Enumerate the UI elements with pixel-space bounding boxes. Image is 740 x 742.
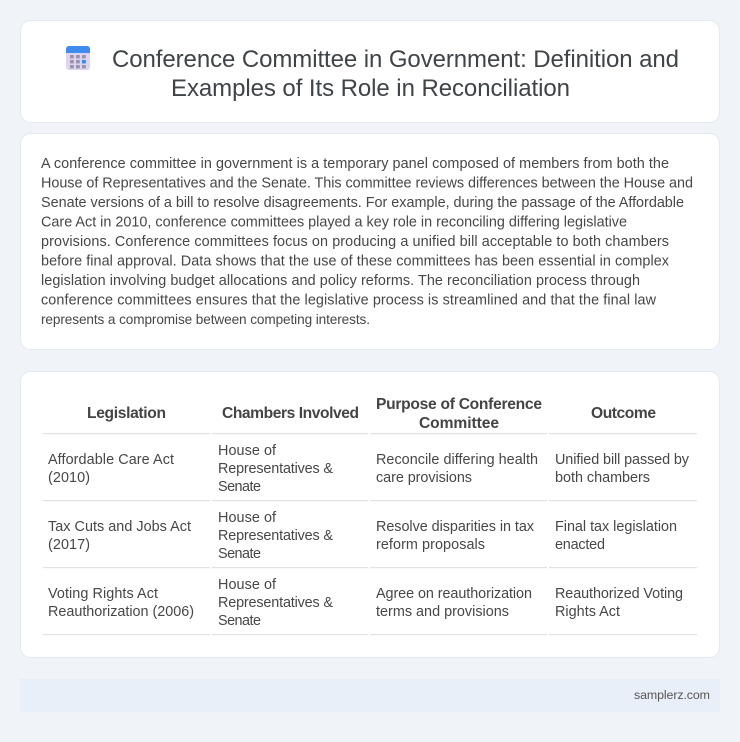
table row: Voting Rights Act Reauthorization: Voting Rights Act bbox=[48, 586, 158, 602]
text block: description paragraph: A conference committee in government is a temporary panel composed of members from both the bbox=[41, 156, 669, 172]
table row: Tax Cuts and Jobs Act: Representatives & bbox=[218, 528, 333, 544]
table row: Tax Cuts and Jobs Act: Resolve disparities in tax bbox=[376, 519, 535, 535]
text block: description paragraph: House of Representatives and the Senate. This committee reviews differences between the House and bbox=[41, 176, 693, 192]
title bbox=[112, 46, 679, 102]
panel: description bbox=[20, 134, 720, 350]
table row: Voting Rights Act Reauthorization bbox=[48, 577, 683, 629]
table row: Tax Cuts and Jobs Act: Final tax legislation bbox=[555, 519, 677, 535]
table row: Affordable Care Act: Representatives & bbox=[218, 461, 333, 477]
title: Examples of Its Role in Reconciliation bbox=[171, 75, 570, 102]
table row: Affordable Care Act: (2010) bbox=[48, 470, 90, 486]
table header row: Chambers Involved bbox=[222, 405, 359, 422]
table row: Affordable Care Act: both chambers bbox=[555, 470, 650, 486]
table row: Tax Cuts and Jobs Act: Senate bbox=[218, 546, 261, 562]
table row: Voting Rights Act Reauthorization: terms and provisions bbox=[376, 604, 509, 620]
icon: calendar bbox=[66, 46, 90, 70]
title: Conference Committee in Government: Definition and bbox=[112, 46, 679, 73]
table row: Voting Rights Act Reauthorization: House of bbox=[218, 577, 277, 593]
text block: description paragraph bbox=[41, 156, 693, 327]
table header row bbox=[87, 396, 656, 432]
footer bar bbox=[20, 679, 720, 712]
text block: description paragraph: represents a compromise between competing interests. bbox=[41, 312, 370, 327]
table row: Voting Rights Act Reauthorization: Senate bbox=[218, 613, 261, 629]
footer text: samplerz.com bbox=[634, 688, 710, 702]
table header row: Outcome bbox=[591, 405, 656, 422]
table row: Voting Rights Act Reauthorization: Rights Act bbox=[555, 604, 620, 620]
text block: description paragraph: Senate versions of a bill to resolve disagreements. For example, during the passage of the Affordable bbox=[41, 195, 684, 211]
table row: Voting Rights Act Reauthorization: Reauthorization (2006) bbox=[48, 604, 194, 620]
text block: description paragraph: Care Act in 2010, conference committees played a key role in reconciling differing legislative bbox=[41, 214, 627, 230]
panel: table card bbox=[20, 372, 720, 658]
panel: title card bbox=[20, 20, 720, 122]
text block: description paragraph: before final approval. Data shows that the use of these committees has been essential in complex bbox=[41, 254, 670, 270]
table row: Voting Rights Act Reauthorization: Representatives & bbox=[218, 595, 333, 611]
text block: description paragraph: provisions. Conference committees focus on producing a unified bill acceptable to both chambers bbox=[41, 234, 669, 250]
table row: Affordable Care Act: Reconcile differing health bbox=[376, 452, 538, 468]
table row: Affordable Care Act: care provisions bbox=[376, 470, 472, 486]
table row: Tax Cuts and Jobs Act: House of bbox=[218, 510, 277, 526]
table row: Affordable Care Act bbox=[48, 443, 690, 495]
table row: Tax Cuts and Jobs Act: reform proposals bbox=[376, 537, 485, 553]
table row: Tax Cuts and Jobs Act: enacted bbox=[555, 537, 605, 553]
table header row: Legislation bbox=[87, 405, 166, 422]
table row: Affordable Care Act: House of bbox=[218, 443, 277, 459]
table row: Affordable Care Act: Affordable Care Act bbox=[48, 452, 174, 468]
table header row: Committee bbox=[419, 415, 499, 432]
text block: description paragraph: conference committees ensures that the legislative process is streamlined and that the final law bbox=[41, 292, 657, 308]
table row: Tax Cuts and Jobs Act: (2017) bbox=[48, 537, 90, 553]
text block: description paragraph: legislation involving budget allocations and policy reforms. The reconciliation process through bbox=[41, 273, 640, 289]
table row: Affordable Care Act: Senate bbox=[218, 479, 261, 495]
table header row: Purpose of Conference bbox=[376, 396, 542, 413]
table row: Tax Cuts and Jobs Act bbox=[48, 510, 677, 562]
table row: Voting Rights Act Reauthorization: Agree on reauthorization bbox=[376, 586, 532, 602]
table row: Affordable Care Act: Unified bill passed by bbox=[555, 452, 690, 468]
table row: Voting Rights Act Reauthorization: Reauthorized Voting bbox=[555, 586, 683, 602]
table row: Tax Cuts and Jobs Act: Tax Cuts and Jobs Act bbox=[48, 519, 191, 535]
